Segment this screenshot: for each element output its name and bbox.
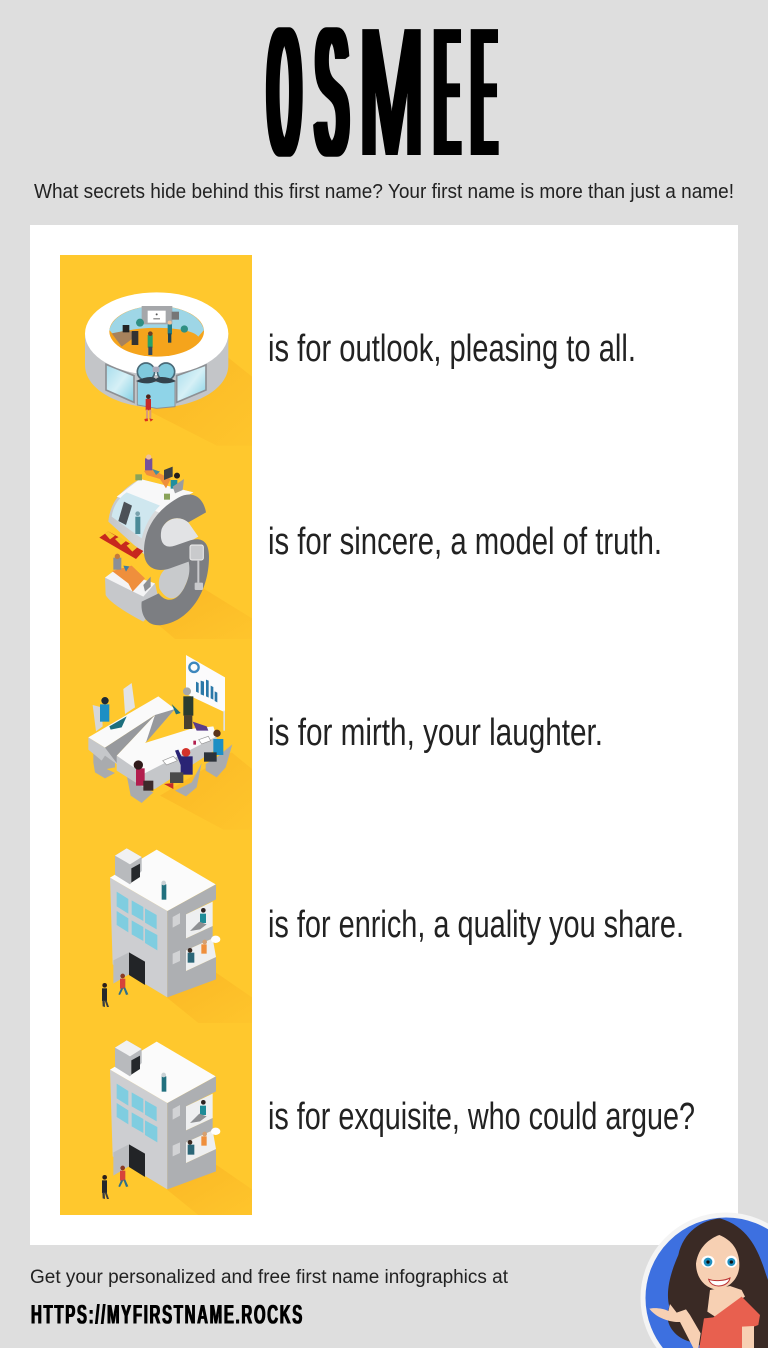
footer url: HTTPS://MYFIRSTNAME.ROCKS <box>31 1300 304 1330</box>
line: S: is for sincere, a model of truth. <box>268 521 662 563</box>
line: M: is for mirth, your laughter. <box>268 712 603 754</box>
tile S: office letter S <box>99 454 252 639</box>
footer text: Get your personalized and free first name infographics at <box>30 1267 509 1288</box>
tile O: round optician building <box>85 292 252 446</box>
tile E: office building <box>102 848 252 1023</box>
title <box>269 0 495 195</box>
yellow illustration column <box>60 255 252 1215</box>
subtitle: What secrets hide behind this first name? Your first name is more than just a name! <box>34 181 734 203</box>
avatar <box>643 1215 768 1348</box>
tile E: second office building <box>102 1040 252 1215</box>
line: O: is for outlook, pleasing to all. <box>268 328 636 370</box>
white card <box>30 225 738 1245</box>
tile M: meeting table letter M <box>88 655 252 830</box>
